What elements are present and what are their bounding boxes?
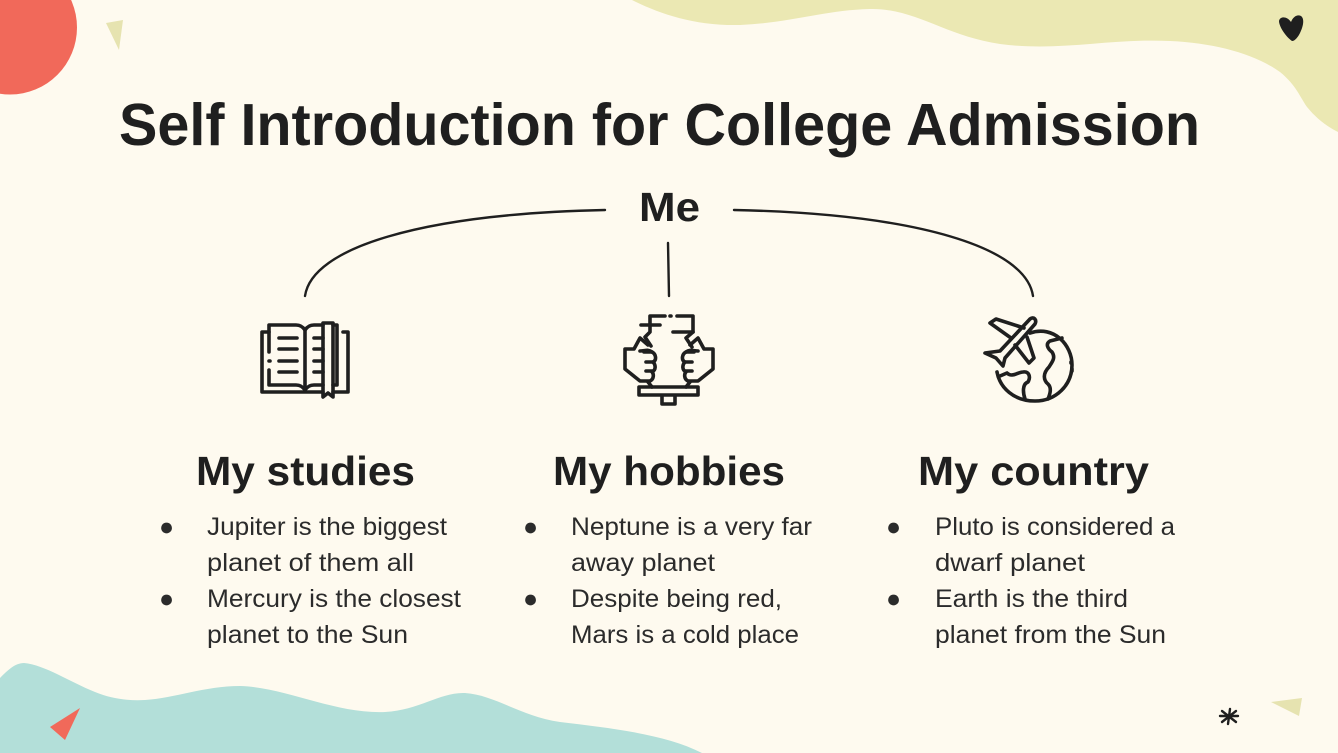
icon: asterisk star xyxy=(1220,709,1238,724)
text block: studies bullets: planet to the Sun xyxy=(207,621,408,649)
title: Self Introduction for College Admission xyxy=(119,92,1200,158)
icon: plane and globe xyxy=(985,318,1072,401)
heading: My hobbies: My hobbies xyxy=(553,448,785,494)
text block: hobbies bullets: ● xyxy=(523,585,538,613)
text block: country bullets: planet from the Sun xyxy=(935,621,1166,649)
text block: hobbies bullets: away planet xyxy=(571,549,715,577)
decorative triangle: coral bottom left xyxy=(50,708,80,740)
decorative blob: top right olive wave xyxy=(632,0,1338,132)
text block: country bullets: Earth is the third xyxy=(935,585,1128,613)
text block: country bullets: Pluto is considered a xyxy=(935,513,1175,541)
text block: studies bullets xyxy=(159,513,461,649)
icon: pottery hands xyxy=(625,316,713,404)
text block: country bullets: ● xyxy=(886,513,901,541)
text block: studies bullets: ● xyxy=(159,513,174,541)
text block: studies bullets: Jupiter is the biggest xyxy=(207,513,447,541)
heading: My studies: My studies xyxy=(196,448,415,494)
connector: left arc xyxy=(305,210,605,296)
text block: hobbies bullets xyxy=(523,513,812,649)
decorative triangle: bottom right xyxy=(1271,698,1302,716)
connector: right arc xyxy=(734,210,1033,296)
heading: My country: My country xyxy=(918,448,1149,494)
text block: country bullets: ● xyxy=(886,585,901,613)
connector: center line xyxy=(668,243,669,296)
text block: hobbies bullets: Despite being red, xyxy=(571,585,782,613)
icon: open book xyxy=(262,323,348,397)
text block: country bullets xyxy=(886,513,1175,649)
text block: hobbies bullets: Mars is a cold place xyxy=(571,621,799,649)
text block: studies bullets: ● xyxy=(159,585,174,613)
decorative triangle: top left xyxy=(106,20,123,50)
text block: hobbies bullets: Neptune is a very far xyxy=(571,513,812,541)
decorative blob: coral circle top left xyxy=(0,0,77,94)
text block: studies bullets: Mercury is the closest xyxy=(207,585,461,613)
text block: country bullets: dwarf planet xyxy=(935,549,1085,577)
heading: Me: Me xyxy=(639,184,700,230)
decorative blob: bottom left teal wave xyxy=(0,663,702,753)
text block: hobbies bullets: ● xyxy=(523,513,538,541)
icon: heart xyxy=(1279,15,1303,41)
text block: studies bullets: planet of them all xyxy=(207,549,414,577)
